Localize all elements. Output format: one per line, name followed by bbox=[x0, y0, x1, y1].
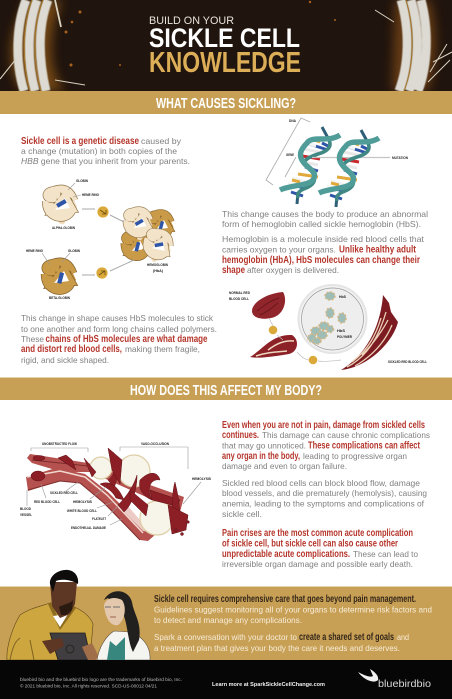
sparks: left ring bbox=[0, 0, 336, 91]
vessel labels bbox=[20, 441, 211, 530]
vessel labels: HEMOLYSIS bbox=[73, 499, 92, 504]
text: care: to detect and manage any complications. bbox=[154, 615, 302, 625]
text: abnormal hemoglobin: carries oxygen to your organs. bbox=[222, 244, 336, 254]
text: polymers: This change in shape causes HbS molecules to stick bbox=[21, 313, 214, 323]
text: blocked blood flow: Sickled red blood cells can block blood flow, damage bbox=[222, 478, 420, 488]
text: abnormal hemoglobin: This change causes the body to produce an abnormal bbox=[222, 209, 428, 219]
globin labels: HEME RING bbox=[82, 192, 99, 197]
text: shared goals: Spark a conversation with your doctor to bbox=[154, 632, 297, 642]
text: abnormal hemoglobin: shape bbox=[222, 264, 245, 276]
text: sickle cell intro: HBB gene that you inherit from your parents. bbox=[21, 156, 190, 166]
cell labels: NORMAL RED bbox=[229, 290, 250, 295]
text: blocked blood flow: anemia, leading to the symptoms and complications of bbox=[222, 498, 425, 508]
diagram: hemoglobin assembly bbox=[26, 178, 176, 300]
cell labels: HbS bbox=[337, 328, 345, 333]
leader lines bbox=[27, 447, 201, 525]
header banner bbox=[0, 0, 452, 91]
icon: beta globin bbox=[44, 260, 76, 293]
leader lines bbox=[42, 183, 81, 265]
globin labels: (HbA) bbox=[153, 268, 164, 273]
icon: hemoglobin bbox=[123, 208, 176, 266]
text: shared goals: create a shared set of goals bbox=[299, 631, 394, 643]
text: chronic damage: damage and even to organ failure. bbox=[222, 461, 347, 471]
sparks: right ring bbox=[375, 0, 452, 91]
text: polymers: chains of HbS molecules are what damage bbox=[46, 333, 208, 345]
globin labels: HEMOGLOBIN bbox=[147, 262, 168, 267]
text: pain crises: irreversible organ damage and possible early death. bbox=[222, 559, 413, 569]
text: chronic damage: leading to progressive organ bbox=[303, 451, 407, 461]
vessel labels: SICKLED RED CELL bbox=[50, 490, 78, 495]
vessel walls bbox=[26, 454, 184, 541]
connector arrows bbox=[82, 206, 134, 279]
diagram: dna bbox=[266, 118, 408, 207]
text: abnormal hemoglobin: Hemoglobin is a molecule inside red blood cells that bbox=[222, 234, 425, 244]
text: blocked blood flow bbox=[222, 478, 427, 519]
text: polymers bbox=[21, 313, 217, 365]
text: shared goals: a treatment plan that gives your body the care it needs and deserves. bbox=[154, 643, 400, 653]
logo: bluebirdbio bbox=[378, 678, 431, 690]
vessel labels: WHITE BLOOD CELL bbox=[67, 508, 97, 513]
globin labels: HEME RING bbox=[26, 248, 43, 253]
vessel labels: UNOBSTRUCTED FLOW bbox=[42, 441, 77, 446]
text: blocked blood flow: sickle cell. bbox=[222, 509, 262, 519]
vessel labels: HEMOLYSIS bbox=[192, 476, 211, 481]
icon: alpha globin bbox=[45, 187, 77, 224]
header title: KNOWLEDGE bbox=[149, 47, 301, 79]
cell labels: BLOOD CELL bbox=[229, 296, 249, 301]
diagram: blood vessel bbox=[20, 441, 211, 541]
text: pain crises: These can lead to bbox=[353, 549, 418, 559]
magnified circle bbox=[298, 285, 366, 353]
sickled cells bbox=[31, 448, 189, 536]
vessel labels: VESSEL bbox=[20, 512, 32, 517]
text: polymers: to one another and form long chains called polymers. bbox=[21, 324, 217, 334]
transition arrows bbox=[269, 318, 341, 364]
text: blocked blood flow: blood vessels, and die prematurely (hemolysis), causing bbox=[222, 488, 427, 498]
cell labels bbox=[229, 290, 427, 364]
text: polymers: rigid, and sickle shaped. bbox=[21, 355, 109, 365]
text: pain crises bbox=[222, 527, 418, 569]
footer bbox=[0, 660, 452, 699]
deforming red blood cell bbox=[250, 335, 297, 358]
text: chronic damage: any organ in the body, bbox=[222, 450, 300, 462]
vessel labels: PLATELET bbox=[92, 516, 106, 521]
globin labels: GLOBIN bbox=[68, 248, 80, 253]
text: chronic damage: continues. bbox=[222, 429, 259, 441]
globin labels: GLOBIN bbox=[76, 178, 88, 183]
illustration: patient bbox=[7, 570, 93, 660]
text: sickle cell intro: a change (mutation) in both copies of the bbox=[21, 146, 177, 156]
text: shared goals bbox=[154, 631, 409, 653]
diagram: red blood cells bbox=[229, 285, 427, 370]
text: care: Guidelines suggest monitoring all of your organs to determine risk factors and bbox=[154, 605, 432, 615]
text: abnormal hemoglobin bbox=[222, 209, 428, 276]
globin labels: ALPHA-GLOBIN bbox=[52, 225, 75, 230]
text: polymers: and distort red blood cells, bbox=[21, 343, 122, 355]
text: polymers: making them fragile, bbox=[125, 344, 200, 354]
illustration: doctor bbox=[82, 591, 150, 660]
heading band: what causes sickling: WHAT CAUSES SICKLING? bbox=[156, 96, 296, 112]
vessel labels: RED BLOOD CELL bbox=[34, 499, 60, 504]
vessel labels: BLOOD bbox=[20, 506, 31, 511]
text: chronic damage: This damage can cause chronic complications bbox=[262, 430, 430, 440]
dna labels: MUTATION bbox=[392, 155, 408, 160]
dna labels: DNA bbox=[289, 118, 296, 123]
header title: BUILD ON YOUR bbox=[149, 15, 234, 27]
legal text: © 2021 bluebird bio, Inc. All rights reserved. SCD-US-00012 04/21 bbox=[20, 682, 157, 688]
logo bbox=[358, 669, 431, 690]
dna labels: GENE bbox=[286, 152, 294, 157]
legal text bbox=[20, 677, 182, 688]
helix one bbox=[280, 127, 340, 204]
panel: comprehensive care bbox=[0, 570, 452, 660]
text: sickle cell intro: caused by bbox=[141, 136, 182, 146]
cell labels: POLYMER bbox=[337, 334, 352, 339]
heading band: how does this affect my body: HOW DOES THIS AFFECT MY BODY? bbox=[130, 383, 322, 399]
cell labels: HbS bbox=[339, 294, 346, 299]
dna labels bbox=[286, 118, 408, 160]
vessel labels: ENDOTHELIAL DAMAGE bbox=[71, 525, 106, 530]
text: care bbox=[154, 593, 432, 625]
learn more link: Learn more at SparkSickleCellChange.com bbox=[212, 682, 325, 688]
header title bbox=[149, 15, 301, 79]
text: chronic damage bbox=[222, 419, 430, 471]
vessel labels: VASO-OCCLUSION bbox=[141, 441, 169, 446]
text: sickle cell intro: Sickle cell is a genetic disease bbox=[21, 135, 139, 147]
globin labels: BETA-GLOBIN bbox=[49, 295, 70, 300]
header title: SICKLE CELL bbox=[149, 23, 300, 53]
heading band: what causes sickling bbox=[0, 91, 452, 114]
text: chronic damage: that may go unnoticed. bbox=[222, 440, 306, 450]
mutation line bbox=[312, 156, 390, 158]
white blood cells bbox=[90, 455, 174, 535]
text: shared goals: and bbox=[397, 632, 409, 642]
normal red blood cell bbox=[252, 292, 285, 319]
heading band: how does this affect my body bbox=[0, 377, 452, 400]
text: abnormal hemoglobin: Unlike healthy adult bbox=[339, 244, 416, 256]
text: abnormal hemoglobin: after oxygen is delivered. bbox=[247, 265, 339, 275]
globin labels bbox=[26, 178, 168, 300]
text: sickle cell intro bbox=[21, 135, 190, 166]
text: abnormal hemoglobin: form of hemoglobin called sickle hemoglobin (HbS). bbox=[222, 219, 421, 229]
cell labels: SICKLED RED BLOOD CELL bbox=[388, 359, 427, 364]
text: pain crises: unpredictable acute complications. bbox=[222, 548, 350, 560]
sickled red blood cell bbox=[341, 295, 398, 370]
text: polymers: These bbox=[21, 334, 44, 344]
helix two bbox=[319, 130, 379, 207]
legal text: bluebird bio and the bluebird bio logo are the trademarks of bluebird bio, Inc. bbox=[20, 677, 182, 682]
